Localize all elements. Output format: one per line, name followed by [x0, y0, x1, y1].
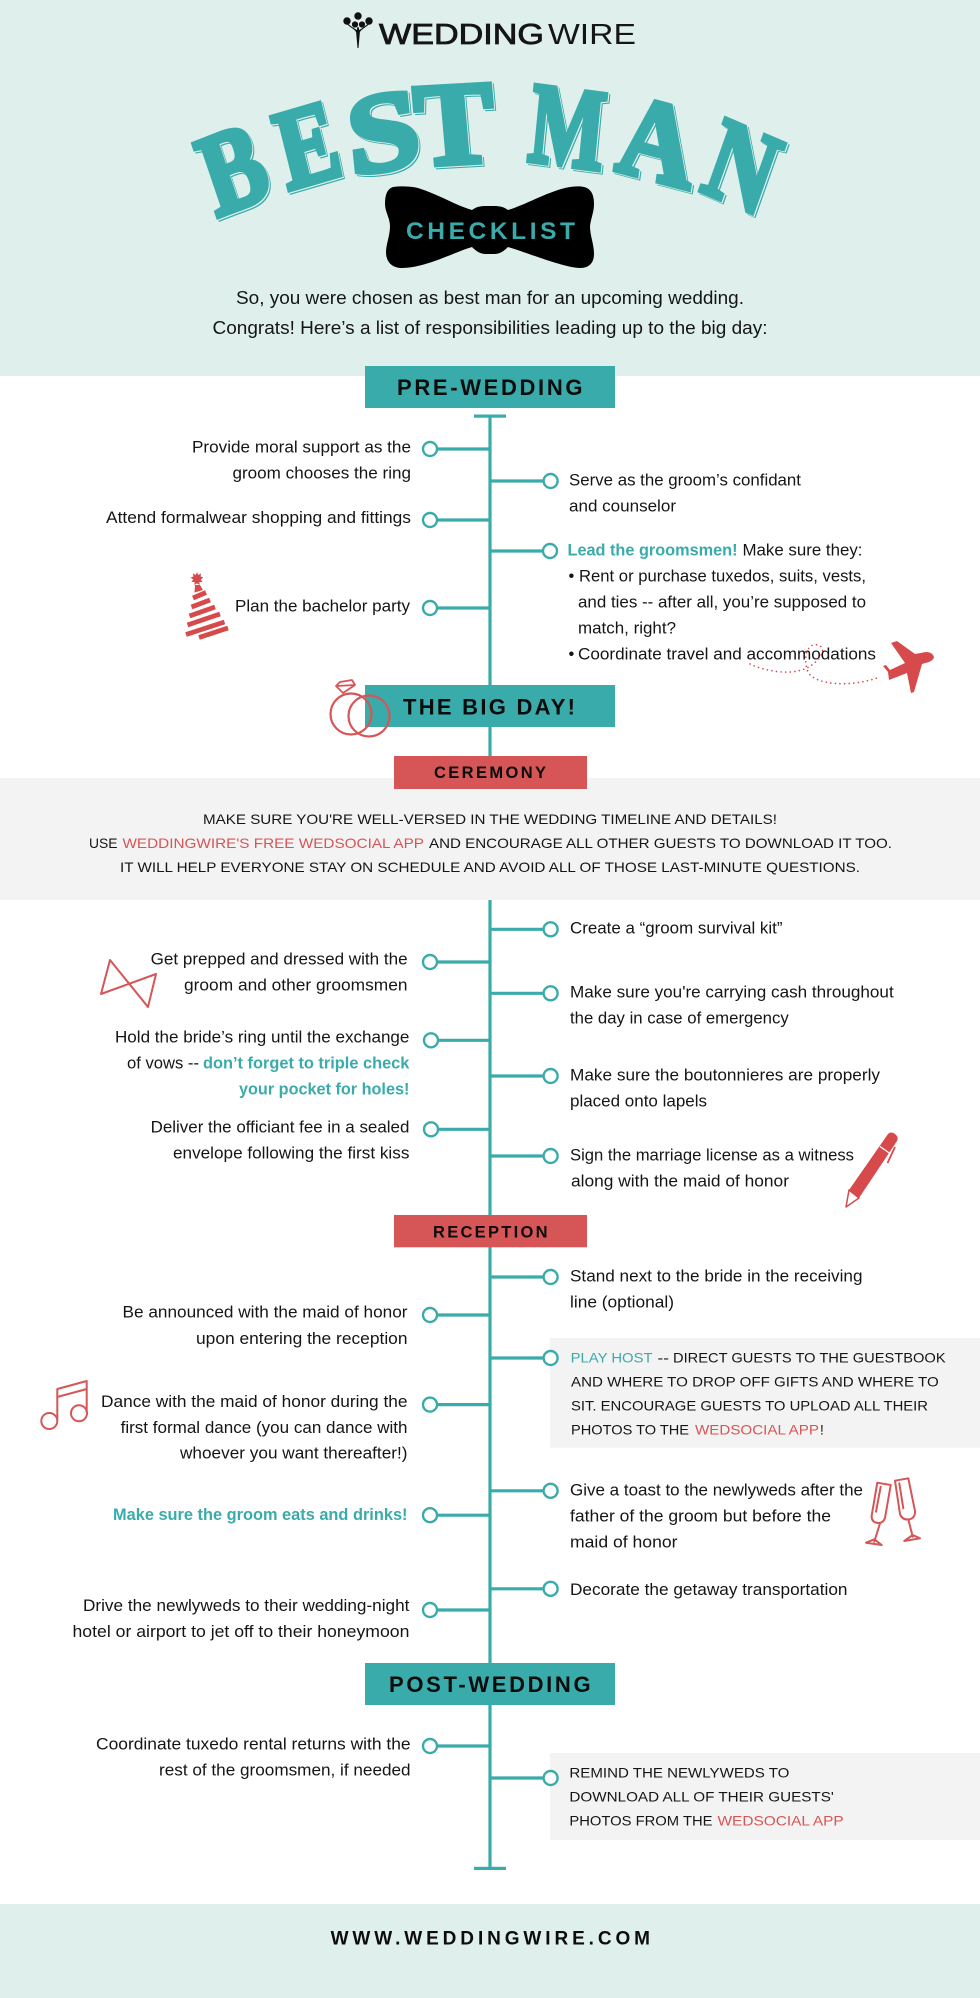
- item: first dance: first formal dance (you can dance with: [121, 1419, 407, 1437]
- item: hold the ring: [115, 1029, 490, 1099]
- item: tuxedo returns: Coordinate tuxedo rental returns with the: [96, 1736, 411, 1754]
- item: tuxedo returns: [96, 1736, 490, 1780]
- item: receiving line: Stand next to the bride in the receiving: [570, 1268, 862, 1286]
- heading: PRE-WEDDING: PRE-WEDDING: [397, 375, 582, 400]
- item: announced: Be announced with the maid of honor: [122, 1304, 408, 1322]
- item: marriage license: along with the maid of honor: [571, 1172, 790, 1190]
- heading: THE BIG DAY!: THE BIG DAY!: [403, 694, 575, 719]
- icon: bow tie outline: [101, 960, 156, 1007]
- panel: play host: !: [820, 1422, 824, 1437]
- item: lead the groomsmen: Make sure they:: [742, 542, 862, 560]
- panel: remind newlyweds: DOWNLOAD ALL OF THEIR GUESTS': [569, 1790, 834, 1805]
- footer: WWW.WEDDINGWIRE.COM: [331, 1929, 650, 1950]
- heading: PRE-WEDDING: [365, 366, 615, 408]
- item: get prepped: [151, 950, 490, 995]
- item: moral support: Provide moral support as the: [192, 439, 411, 457]
- title: BEST MAN: A: [610, 69, 704, 215]
- panel: remind newlyweds: REMIND THE NEWLYWEDS TO: [569, 1766, 789, 1781]
- heading: POST-WEDDING: POST-WEDDING: [389, 1672, 591, 1697]
- title: BEST MAN: B: [183, 96, 282, 241]
- item: lead the groomsmen: match, right?: [578, 620, 676, 638]
- bow tie with CHECKLIST: CHECKLIST: [406, 218, 575, 245]
- ceremony callout text: AND ENCOURAGE ALL OTHER GUESTS TO DOWNLOAD IT TOO.: [429, 836, 892, 851]
- intro text: Congrats! Here’s a list of responsibilities leading up to the big day:: [212, 317, 768, 338]
- item: announced: [122, 1304, 490, 1348]
- item: getaway transportation: Decorate the getaway transportation: [570, 1581, 848, 1599]
- panel: play host: AND WHERE TO DROP OFF GIFTS AND WHERE TO: [571, 1374, 939, 1389]
- heading: CEREMONY: CEREMONY: [434, 764, 546, 782]
- title: BEST MAN: S: [342, 65, 425, 200]
- heading: CEREMONY: [394, 756, 587, 789]
- item: boutonnieres: Make sure the boutonnieres are properly: [570, 1066, 881, 1084]
- icon: airplane with dotted trail: [750, 641, 934, 693]
- item: officiant fee: [151, 1118, 490, 1162]
- item: lead the groomsmen: •: [568, 568, 574, 586]
- icon: music notes: [41, 1381, 87, 1429]
- panel: remind newlyweds: WEDSOCIAL APP: [718, 1814, 844, 1829]
- ceremony callout text: WEDDINGWIRE'S FREE WEDSOCIAL APP: [122, 836, 424, 851]
- icon: champagne flutes: [866, 1478, 920, 1545]
- item: marriage license: Sign the marriage license as a witness: [570, 1146, 854, 1164]
- item: announced: upon entering the reception: [196, 1330, 408, 1348]
- item: lead the groomsmen: [490, 542, 876, 664]
- title: BEST MAN: E: [264, 76, 352, 215]
- item: hold the ring: don’t forget to triple check: [203, 1055, 410, 1073]
- panel: play host: --: [658, 1350, 669, 1365]
- item: confidant: Serve as the groom’s confidant: [569, 472, 801, 490]
- bow tie with CHECKLIST: [385, 186, 594, 268]
- item: lead the groomsmen: Coordinate travel and accommodations: [578, 646, 876, 664]
- item: lead the groomsmen: and ties -- after all, you’re supposed to: [578, 594, 866, 612]
- ceremony callout text: USE: [89, 836, 118, 851]
- logo: WeddingWire: WEDDING: [379, 19, 544, 51]
- header panel background: [0, 0, 980, 376]
- footer: [0, 1904, 980, 1998]
- item: first dance: Dance with the maid of honor during the: [101, 1393, 408, 1411]
- item: hold the ring: Hold the bride’s ring until the exchange: [115, 1029, 409, 1047]
- panel: play host: PLAY HOST: [571, 1350, 653, 1365]
- item: drive the newlyweds: hotel or airport to jet off to their honeymoon: [72, 1623, 409, 1641]
- timeline spine: [474, 414, 506, 1870]
- heading: THE BIG DAY!: [365, 685, 615, 727]
- item: toast: [490, 1482, 863, 1552]
- item: get prepped: Get prepped and dressed with the: [151, 950, 408, 968]
- panel: play host: SIT. ENCOURAGE GUESTS TO UPLOAD ALL THEIR: [571, 1398, 928, 1413]
- item: moral support: groom chooses the ring: [232, 465, 411, 483]
- intro text: So, you were chosen as best man for an upcoming wedding.: [236, 287, 744, 308]
- item: tuxedo returns: rest of the groomsmen, if needed: [159, 1762, 411, 1780]
- title: BEST MAN: M: [524, 60, 611, 195]
- item: lead the groomsmen: Lead the groomsmen!: [568, 542, 738, 560]
- logo: WeddingWire: [343, 12, 636, 51]
- title: BEST MAN: N: [690, 93, 795, 240]
- item: boutonnieres: placed onto lapels: [570, 1092, 707, 1110]
- panel: play host: [490, 1338, 980, 1448]
- title: BEST MAN: [183, 58, 795, 241]
- heading: RECEPTION: [394, 1215, 587, 1247]
- icon: party hat: [186, 572, 228, 638]
- item: lead the groomsmen: •: [568, 646, 574, 664]
- item: get prepped: groom and other groomsmen: [184, 977, 408, 995]
- ceremony callout text: IT WILL HELP EVERYONE STAY ON SCHEDULE AND AVOID ALL OF THOSE LAST-MINUTE QUESTIONS.: [120, 860, 860, 875]
- item: officiant fee: Deliver the officiant fee in a sealed: [151, 1118, 409, 1136]
- item: receiving line: [490, 1268, 862, 1312]
- item: carrying cash: Make sure you're carrying cash throughout: [570, 984, 894, 1002]
- item: drive the newlyweds: [72, 1597, 490, 1641]
- intro text: [212, 287, 768, 338]
- item: marriage license: [490, 1146, 854, 1190]
- item: hold the ring: your pocket for holes!: [239, 1081, 409, 1099]
- logo: WeddingWire: WIRE: [548, 19, 636, 51]
- item: toast: Give a toast to the newlyweds after the: [570, 1482, 863, 1500]
- item: carrying cash: [490, 984, 894, 1028]
- ceremony callout text: MAKE SURE YOU'RE WELL-VERSED IN THE WEDDING TIMELINE AND DETAILS!: [203, 812, 777, 827]
- title: BEST MAN: T: [410, 58, 500, 191]
- panel: play host: WEDSOCIAL APP: [695, 1422, 819, 1437]
- panel: remind newlyweds: PHOTOS FROM THE: [569, 1814, 712, 1829]
- icon: wedding rings: [330, 680, 390, 736]
- item: first dance: whoever you want thereafter!): [179, 1445, 408, 1463]
- panel: remind newlyweds: [490, 1753, 980, 1840]
- icon: pen: [846, 1132, 898, 1207]
- item: groom survival kit: Create a “groom survival kit”: [570, 920, 782, 938]
- item: officiant fee: envelope following the first kiss: [173, 1144, 409, 1162]
- panel: play host: PHOTOS TO THE: [571, 1422, 689, 1437]
- ceremony callout text: [89, 812, 892, 875]
- item: groom eats and drinks: Make sure the groom eats and drinks!: [113, 1506, 408, 1524]
- item: moral support: [192, 439, 490, 483]
- item: confidant: and counselor: [569, 498, 677, 516]
- item: formalwear: Attend formalwear shopping and fittings: [106, 509, 411, 527]
- item: carrying cash: the day in case of emergency: [570, 1010, 789, 1028]
- item: hold the ring: of vows --: [127, 1055, 199, 1073]
- item: drive the newlyweds: Drive the newlyweds to their wedding-night: [83, 1597, 410, 1615]
- item: bachelor party: Plan the bachelor party: [235, 598, 411, 616]
- heading: POST-WEDDING: [365, 1663, 615, 1705]
- item: first dance: [101, 1393, 490, 1463]
- item: toast: father of the groom but before the: [570, 1508, 831, 1526]
- item: toast: maid of honor: [570, 1534, 678, 1552]
- item: lead the groomsmen: Rent or purchase tuxedos, suits, vests,: [579, 568, 866, 586]
- item: bachelor party: [235, 598, 490, 616]
- panel: play host: DIRECT GUESTS TO THE GUESTBOOK: [673, 1350, 946, 1365]
- heading: RECEPTION: RECEPTION: [433, 1223, 548, 1241]
- item: boutonnieres: [490, 1066, 881, 1110]
- icon: bouquet: [343, 12, 373, 48]
- item: confidant: [490, 472, 801, 516]
- item: receiving line: line (optional): [570, 1294, 674, 1312]
- gray band background: [0, 778, 980, 900]
